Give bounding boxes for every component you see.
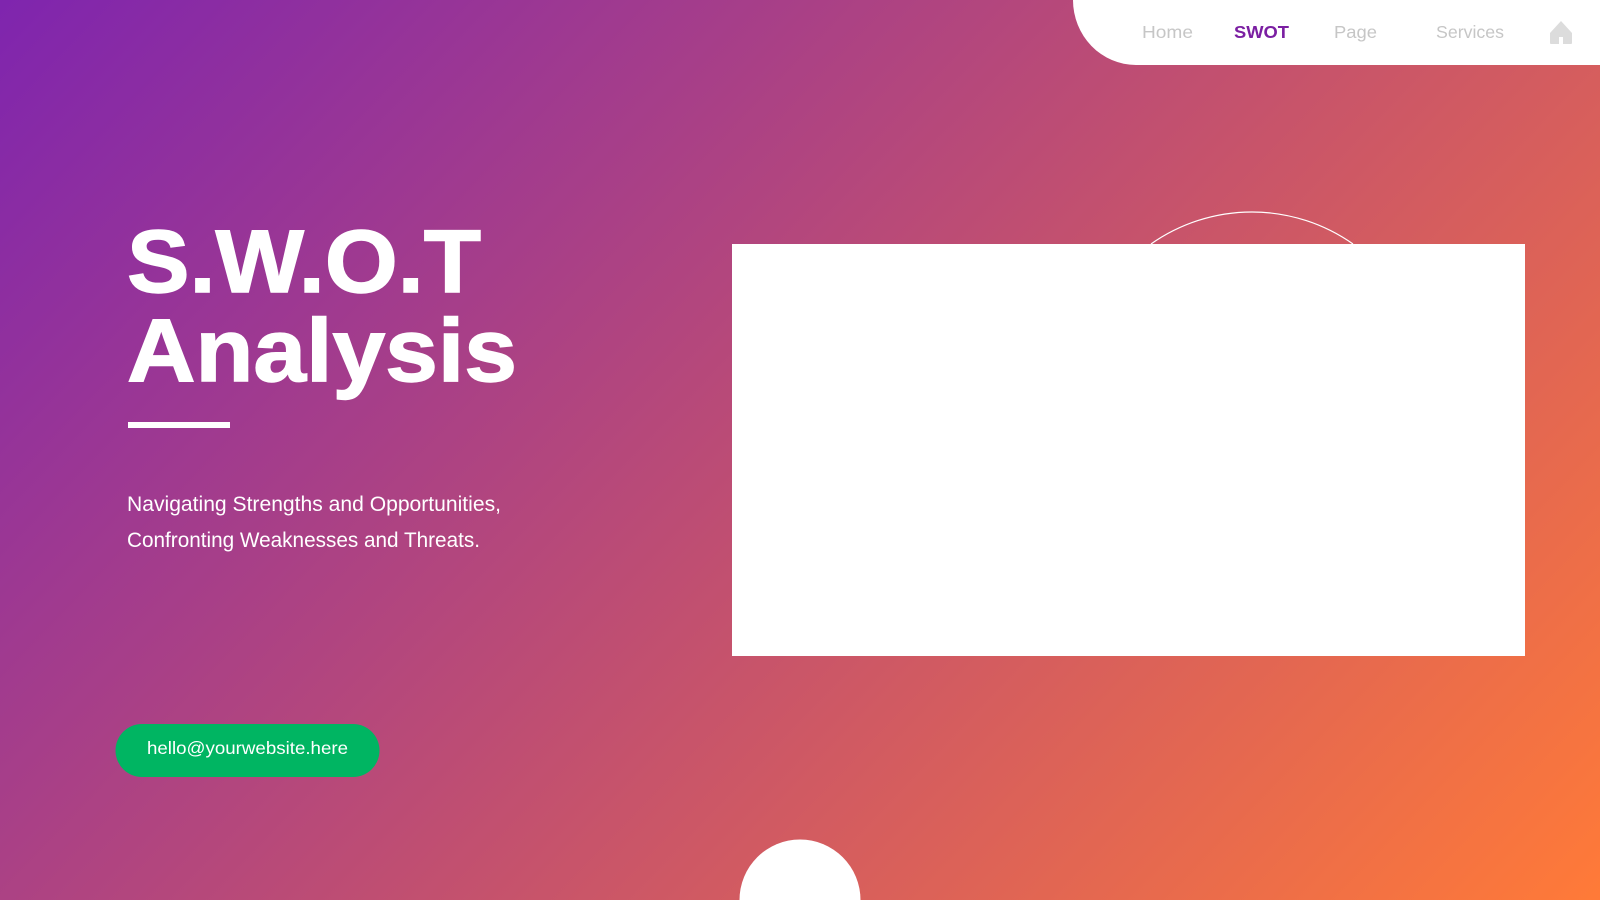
decorative arc behind content panel: [1151, 212, 1353, 244]
decorative white circle: [740, 840, 860, 900]
nav item: Home: Home: [1142, 22, 1193, 42]
subtitle: Confronting Weaknesses and Threats.: [127, 529, 480, 552]
content panel: [732, 244, 1525, 656]
subtitle: [127, 493, 501, 552]
navigation bar: [1073, 0, 1600, 65]
contact button: hello@yourwebsite.here: [147, 738, 348, 758]
title: S.W.O.T: [127, 211, 481, 311]
nav panel: [1073, 0, 1600, 65]
nav item: Services: Services: [1436, 22, 1504, 42]
contact button: [116, 724, 380, 777]
title: Analysis: [127, 300, 517, 400]
title: [127, 211, 517, 400]
subtitle: Navigating Strengths and Opportunities,: [127, 493, 501, 516]
nav item: SWOT: SWOT: [1234, 22, 1289, 42]
icon: home: [1550, 21, 1572, 44]
title underline: [128, 422, 230, 428]
nav item: Page: Page: [1334, 22, 1377, 42]
